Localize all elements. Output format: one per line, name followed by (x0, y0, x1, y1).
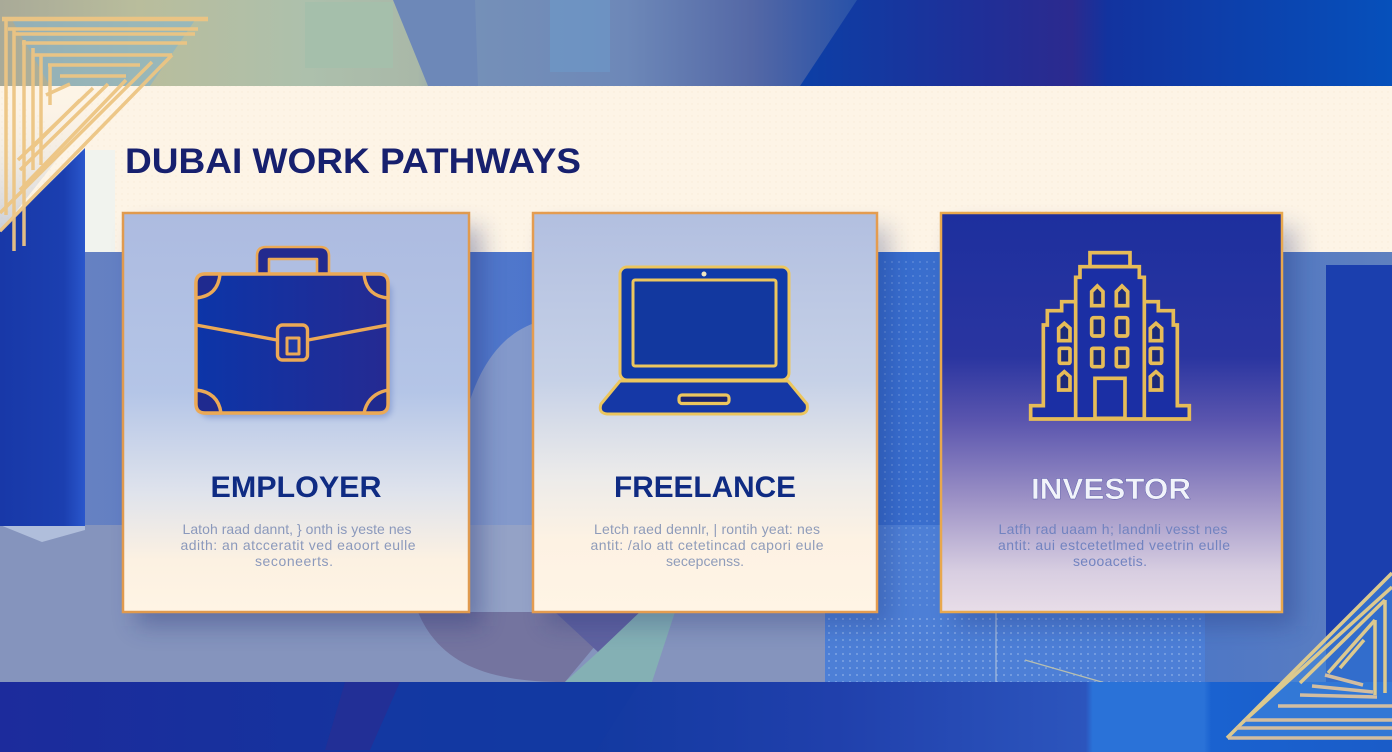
description: investor: antit: aui estcetetlmed veetrin eulle (998, 537, 1230, 553)
card: employer (123, 213, 482, 626)
background: right dark blue panel (1326, 265, 1392, 683)
decoration: gold triangle bottom-right (1227, 573, 1392, 738)
title: DUBAI WORK PATHWAYS (125, 142, 581, 181)
description: investor: seooacetis. (1073, 553, 1147, 569)
label: employer: EMPLOYER (210, 471, 382, 504)
label: investor: INVESTOR (1031, 473, 1191, 506)
description: investor (998, 521, 1230, 569)
description: employer: seconeerts. (255, 553, 333, 569)
description: freelance: secepcenss. (666, 553, 744, 569)
description: freelance: antit: /alo att cetetincad capori eule (590, 537, 824, 553)
description: employer: adith: an atcceratit ved eaoort eulle (180, 537, 416, 553)
background: top band (0, 0, 1392, 86)
background: bottom band (0, 682, 1392, 752)
description: employer (180, 521, 416, 569)
card: freelance (533, 213, 890, 626)
description: investor: Latfh rad uaam h; landnli vesst nes (998, 521, 1228, 537)
label: freelance: FREELANCE (614, 471, 796, 504)
description: freelance (590, 521, 824, 569)
icon: building (1031, 253, 1189, 419)
background: triangle interior top-left (0, 86, 115, 232)
icon: briefcase (196, 247, 392, 418)
description: freelance: Letch raed dennlr, | rontih yeat: nes (594, 521, 820, 537)
decoration: gold triangle top-left (0, 19, 208, 251)
background: lower section (0, 252, 1392, 752)
card: investor (941, 213, 1296, 626)
description: employer: Latoh raad dannt, } onth is yeste nes (182, 521, 412, 537)
icon: laptop (600, 267, 807, 414)
background: cream band (0, 86, 1392, 253)
background: left dark blue panel (0, 148, 85, 526)
